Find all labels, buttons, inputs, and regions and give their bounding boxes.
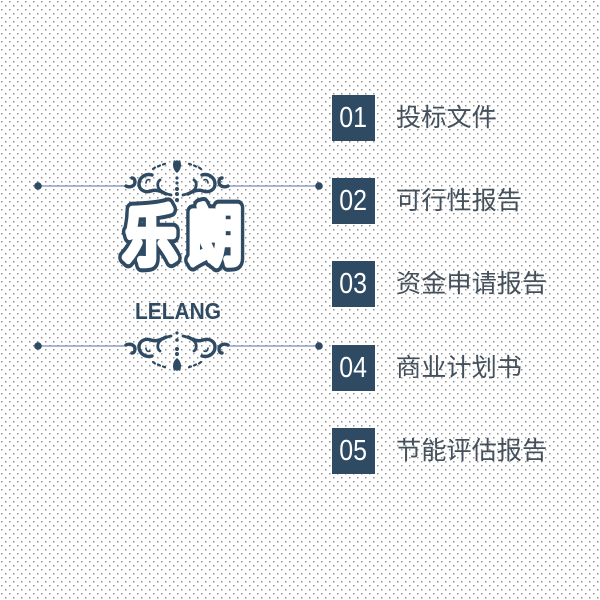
logo characters [123,184,242,278]
list item 05: 05 [340,435,367,467]
list item 04: 04 [340,352,367,384]
logo characters: 朗 [188,184,242,278]
bottom ornament [34,331,323,371]
list item 02: 02 [340,185,367,217]
list item 05 [332,428,547,474]
list item 01: 01 [340,102,367,134]
list item 05: 节能评估报告 [396,437,547,465]
logo characters: 朗 [188,184,242,278]
list item 04: 商业计划书 [396,354,522,382]
list item 03: 03 [340,268,367,300]
logo characters: 乐 [123,184,177,278]
brand name: LELANG [135,298,221,324]
list item 02 [332,178,522,224]
list item 01: 投标文件 [396,104,497,132]
list item 02: 可行性报告 [396,187,522,215]
list item 03: 资金申请报告 [396,270,547,298]
list item 01 [332,95,497,141]
list item 03 [332,261,547,307]
logo characters: 乐 [123,184,177,278]
list item 04 [332,345,522,391]
top ornament [34,160,323,202]
